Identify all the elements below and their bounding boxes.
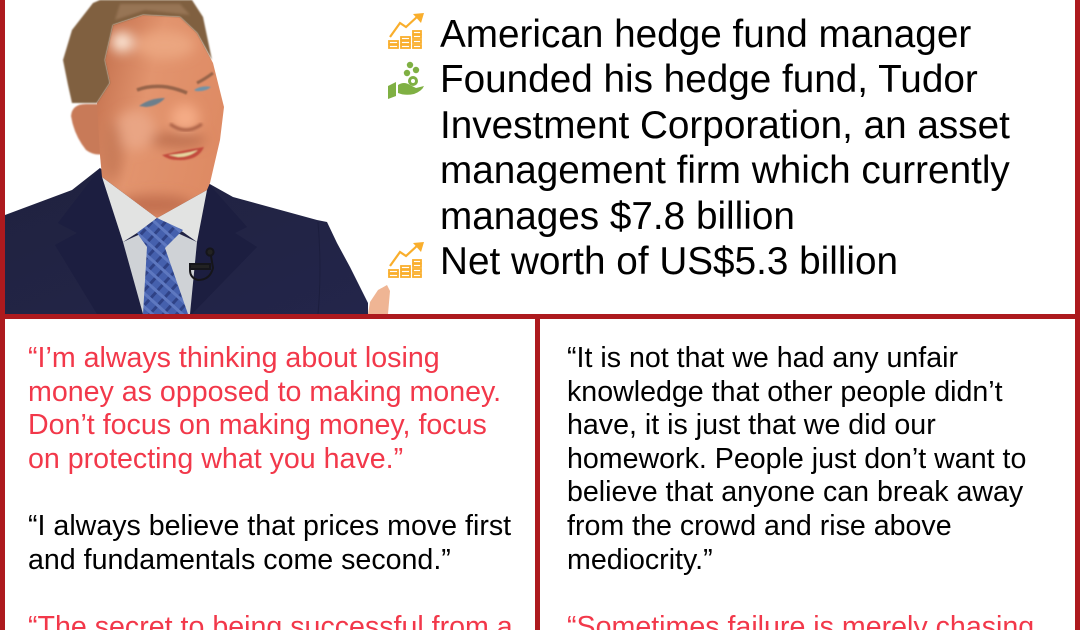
bio text list: manages $7.8 billion [440,195,795,238]
quote: prices move first [28,510,511,576]
icon: rising coins chart 1 [388,13,424,49]
quote: losing money: on protecting what you have.” [28,443,403,475]
shoulder seam [318,222,320,314]
lapel microphone [190,248,214,280]
blue checked tie [137,218,188,314]
panel: left quotes [28,342,513,630]
quote: losing money: money as opposed to making money. [28,376,501,408]
bio text list [440,12,1010,283]
bio text list: Founded his hedge fund, Tudor [440,58,978,101]
quote: did our homework: have, it is just that we did our [567,409,936,441]
quote: prices move first: and fundamentals come second.” [28,544,451,576]
face highlights and shadows [102,31,206,215]
lapels [55,168,257,314]
quote: prices move first: “I always believe that prices move first [28,510,511,542]
quote: did our homework: from the crowd and rise above [567,510,952,542]
quote: losing money [28,342,501,475]
suit jacket [5,168,368,314]
portrait photo: man in navy suit [5,0,390,314]
quote: did our homework: mediocrity.” [567,544,713,576]
quote: losing money: “I’m always thinking about losing [28,342,440,374]
bio text list: Net worth of US$5.3 billion [440,240,898,283]
bio text list: management firm which currently [440,149,1010,192]
hair [63,0,212,103]
icon: hand with falling coins [388,62,424,99]
quote: did our homework: believe that anyone can break away [567,476,1023,508]
bio text list: Investment Corporation, an asset [440,104,1010,147]
quote: did our homework: “It is not that we had any unfair [567,342,958,374]
face [97,15,224,218]
nose shadow [170,124,202,130]
panel: right quotes [567,342,1034,630]
hair highlight [115,4,190,20]
eyebrows and eyes [137,73,213,107]
icon: rising coins chart 2 [388,242,424,278]
thumb [368,285,390,314]
quote: did our homework: homework. People just don’t want to [567,443,1026,475]
quote: did our homework [567,342,1026,576]
quote: did our homework: knowledge that other people didn’t [567,376,1003,408]
shirt and collar [102,177,207,314]
quote: losing money: Don’t focus on making money, focus [28,409,487,441]
ear [71,104,104,154]
bio text list: American hedge fund manager [440,12,971,56]
mouth [162,147,204,160]
